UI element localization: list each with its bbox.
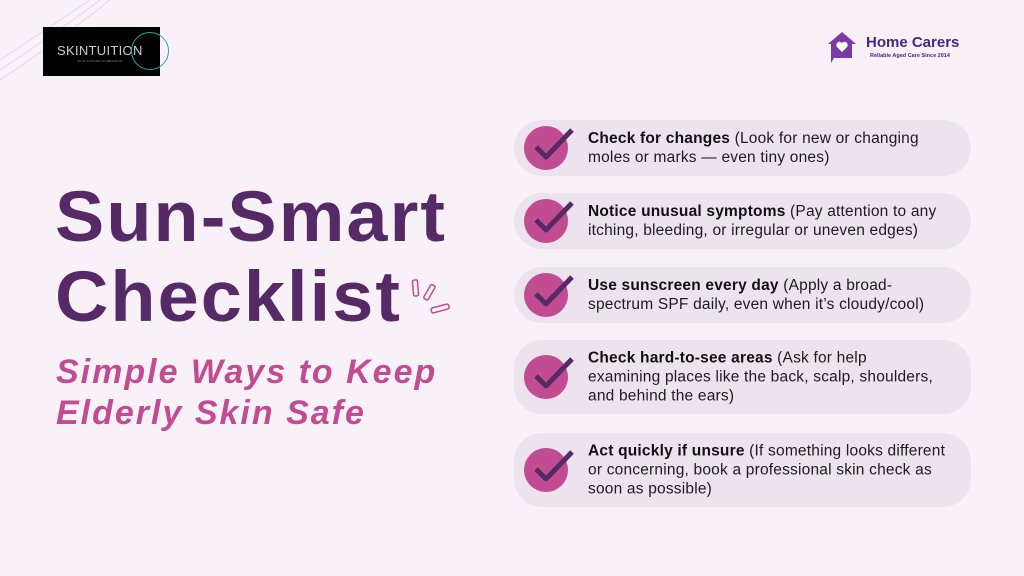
checklist item 3: spectrum SPF daily, even when it’s cloudy/cool) — [588, 296, 924, 313]
checklist item 1: Check for changes (Look for new or changing — [588, 130, 919, 147]
decorative lines top-left — [0, 0, 110, 80]
logo: Home Carers: Reliable Aged Care Since 2014 — [870, 53, 950, 59]
logo: Home Carers: Home Carers — [866, 34, 959, 51]
logo: Skintuition: SKINTUITION — [57, 43, 143, 58]
checklist item 5: Act quickly if unsure (If something looks different — [588, 442, 945, 460]
checklist item 5: or concerning, book a professional skin check as — [588, 462, 932, 478]
title: Sun-Smart — [55, 178, 447, 257]
subtitle: Simple Ways to Keep — [56, 353, 437, 391]
subtitle — [56, 353, 437, 432]
checklist item 5 — [514, 433, 971, 507]
logo: Home Carers — [828, 32, 959, 63]
icon: sparkle accent — [412, 279, 450, 314]
logo: Skintuition — [43, 27, 160, 76]
title: Checklist — [55, 258, 402, 337]
checklist item 3: Use sunscreen every day (Apply a broad- — [588, 277, 892, 294]
checklist item 1 — [514, 120, 971, 176]
subtitle: Elderly Skin Safe — [56, 394, 366, 432]
title — [55, 178, 447, 337]
icon: house heart — [828, 32, 856, 63]
checklist item 4: and behind the ears) — [588, 388, 734, 404]
checklist item 1: moles or marks — even tiny ones) — [588, 149, 830, 166]
checklist item 2 — [514, 193, 971, 249]
checklist item 4 — [514, 340, 971, 414]
checklist item 4: examining places like the back, scalp, shoulders, — [588, 368, 933, 386]
logo: Skintuition: SKIN CANCER SCREENING — [77, 59, 122, 63]
checklist item 3 — [514, 267, 971, 323]
checklist item 2: itching, bleeding, or irregular or uneven edges) — [588, 222, 918, 239]
checklist item 2: Notice unusual symptoms (Pay attention to any — [588, 203, 936, 220]
checklist item 5: soon as possible) — [588, 480, 712, 498]
checklist item 4: Check hard-to-see areas (Ask for help — [588, 350, 867, 366]
